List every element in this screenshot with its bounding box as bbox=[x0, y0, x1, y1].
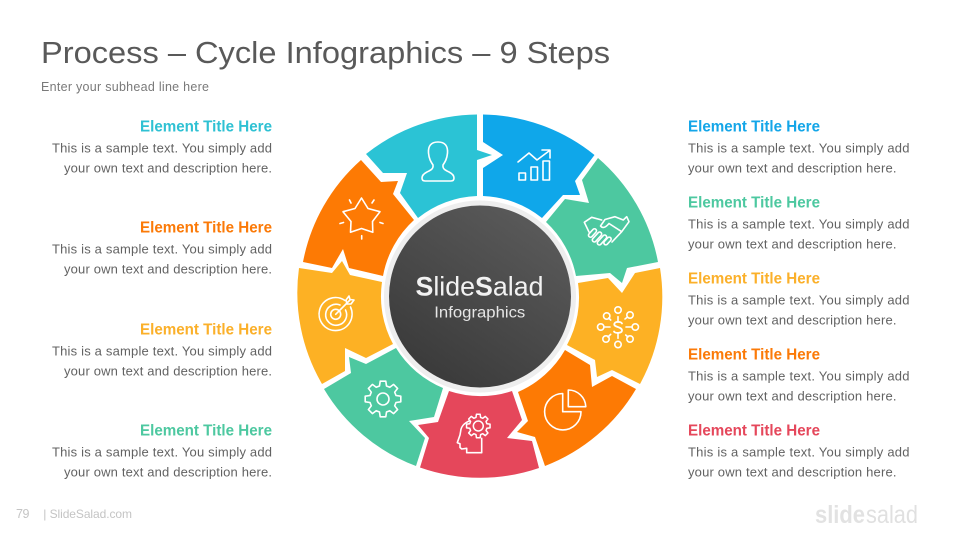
right text block 4: This is a sample text. You simply add bbox=[688, 368, 910, 383]
left text block 3: This is a sample text. You simply add bbox=[52, 343, 272, 358]
right text block 5: This is a sample text. You simply add bbox=[688, 444, 910, 459]
right text block 2: Element Title Here bbox=[688, 195, 820, 212]
left text block 3: Element Title Here bbox=[140, 322, 272, 339]
icon: pie chart bbox=[545, 390, 586, 430]
segment 3: green bbox=[546, 158, 658, 283]
title: Process – Cycle Infographics – 9 Steps bbox=[41, 35, 610, 70]
right text block 2 bbox=[688, 195, 910, 251]
segment 5: orange bbox=[517, 350, 636, 466]
left text block 2 bbox=[52, 220, 272, 276]
footer logo: slide bbox=[815, 501, 865, 529]
icon: money network bbox=[598, 307, 638, 348]
subhead: Enter your subhead line here bbox=[41, 80, 209, 94]
right text block 3: Element Title Here bbox=[688, 271, 820, 288]
segment 1: cyan bbox=[366, 114, 492, 218]
left text block 4: Element Title Here bbox=[140, 423, 272, 440]
left text block 4 bbox=[52, 423, 272, 479]
icon: head with gear bbox=[457, 414, 490, 453]
right text block 3: This is a sample text. You simply add bbox=[688, 292, 910, 307]
left text block 2: This is a sample text. You simply add bbox=[52, 241, 272, 256]
right text block 3 bbox=[688, 271, 910, 327]
segment 2: blue bbox=[483, 114, 594, 218]
footer logo bbox=[815, 501, 918, 529]
right text block 4 bbox=[688, 347, 910, 403]
left text block 3 bbox=[52, 322, 272, 378]
segment 8: yellow bbox=[297, 261, 393, 384]
left text block 4: your own text and description here. bbox=[64, 464, 272, 479]
segment 4: yellow bbox=[567, 268, 662, 384]
icon: target with dart bbox=[319, 296, 354, 331]
segment 9: orange bbox=[303, 160, 414, 276]
icon: star bbox=[340, 198, 383, 239]
icon: person bbox=[422, 142, 454, 181]
right text block 2: your own text and description here. bbox=[688, 236, 896, 251]
segment 7: green bbox=[324, 348, 443, 466]
right text block 3: your own text and description here. bbox=[688, 312, 896, 327]
icon: growth chart bbox=[518, 150, 550, 180]
right text block 5: Element Title Here bbox=[688, 423, 820, 440]
right text block 1: Element Title Here bbox=[688, 119, 820, 136]
right text block 4: your own text and description here. bbox=[688, 388, 896, 403]
left text block 2: your own text and description here. bbox=[64, 261, 272, 276]
right text block 4: Element Title Here bbox=[688, 347, 820, 364]
left text block 1: Element Title Here bbox=[140, 119, 272, 136]
left text block 3: your own text and description here. bbox=[64, 363, 272, 378]
left text block 1: This is a sample text. You simply add bbox=[52, 140, 272, 155]
cycle diagram bbox=[297, 114, 662, 478]
center caption: Infographics bbox=[434, 305, 526, 322]
right text block 1 bbox=[688, 119, 910, 175]
left text block 1: your own text and description here. bbox=[64, 160, 272, 175]
right text block 2: This is a sample text. You simply add bbox=[688, 216, 910, 231]
right text block 1: This is a sample text. You simply add bbox=[688, 140, 910, 155]
left text block 1 bbox=[52, 119, 272, 175]
center brand name: SlideSalad bbox=[416, 272, 544, 302]
center circle bbox=[384, 200, 576, 392]
left text block 4: This is a sample text. You simply add bbox=[52, 444, 272, 459]
right text block 5 bbox=[688, 423, 910, 479]
left text block 2: Element Title Here bbox=[140, 220, 272, 237]
right text block 1: your own text and description here. bbox=[688, 160, 896, 175]
segment 6: red bbox=[418, 391, 539, 478]
footer page number: 79 bbox=[16, 507, 30, 521]
icon: handshake bbox=[584, 217, 629, 246]
icon: gear bbox=[365, 381, 401, 417]
right text block 5: your own text and description here. bbox=[688, 464, 896, 479]
footer logo: salad bbox=[866, 501, 918, 529]
footer site name: | SlideSalad.com bbox=[43, 507, 132, 521]
